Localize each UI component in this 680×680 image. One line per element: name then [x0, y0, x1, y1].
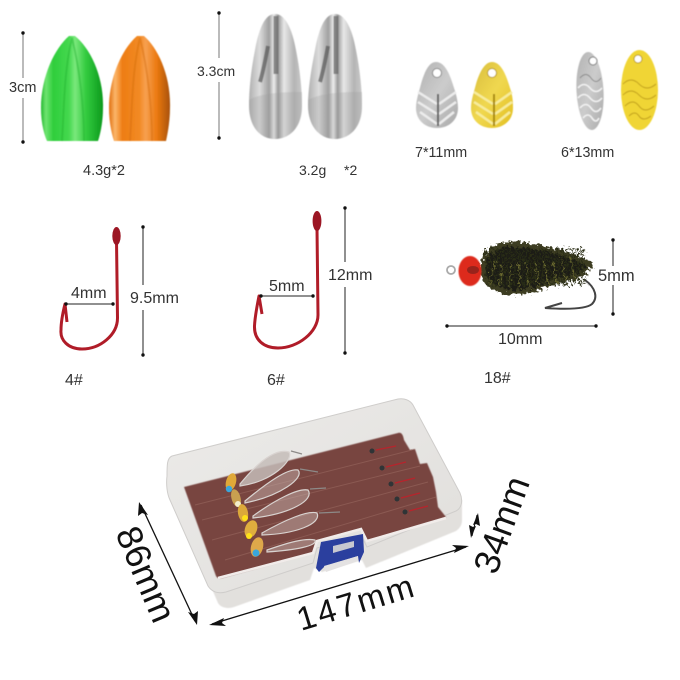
hook: 4#	[61, 227, 121, 349]
dimension: 3.3cm: 3.3cm	[197, 63, 235, 79]
label: 86mm: 86mm	[108, 520, 184, 628]
lure: green	[41, 36, 103, 141]
dimension: 5mm: 5mm	[269, 278, 305, 295]
dimension: 12mm	[328, 206, 372, 355]
arrow: 34mm	[469, 513, 480, 538]
arrow: 86mm	[138, 502, 198, 625]
label: 3.2g: 3.2g	[299, 162, 326, 178]
lure: silver left	[249, 14, 302, 139]
dimension: 3cm: 3cm	[9, 80, 36, 96]
dimension: 12mm: 12mm	[328, 267, 372, 284]
arrow: 147mm	[209, 545, 469, 626]
blade: silver scale	[574, 51, 606, 131]
box lid	[167, 399, 462, 593]
yellow beads	[224, 472, 265, 558]
rig markers	[370, 446, 428, 514]
label: 18#: 18#	[484, 370, 511, 387]
dimension: 10mm fly: 10mm	[498, 331, 542, 348]
clear spinners	[240, 451, 340, 552]
dimension: 3cm	[9, 31, 36, 144]
dimension: 4mm: 4mm	[71, 285, 107, 302]
dimension: 5mm fly: 5mm	[598, 267, 635, 285]
blade: gold scale	[621, 50, 658, 130]
label: 7*11mm: 7*11mm	[415, 145, 467, 161]
blue latch	[316, 534, 364, 572]
brown cards	[184, 433, 446, 578]
label: 34mm: 34mm	[465, 471, 538, 579]
label: *2: *2	[344, 162, 357, 178]
dimension: 5mm	[259, 278, 315, 298]
lid rim highlight	[218, 518, 446, 578]
label: 4#: 4#	[65, 372, 83, 389]
blade: gold leaf	[471, 62, 513, 128]
dimension: 3.3cm	[197, 11, 235, 140]
plastic box	[167, 399, 462, 608]
dimension: 10mm fly	[445, 324, 598, 348]
fly lure	[447, 244, 595, 309]
hook: 6#	[254, 211, 321, 348]
lure: silver right	[308, 14, 362, 139]
label: 6#: 6#	[267, 372, 285, 389]
label: 6*13mm: 6*13mm	[561, 145, 614, 161]
dimension: 9.5mm: 9.5mm	[130, 290, 179, 307]
label: 4.3g*2: 4.3g*2	[83, 163, 125, 179]
label: 147mm: 147mm	[292, 566, 420, 638]
dimension: 4mm	[64, 285, 115, 306]
dimension: 5mm fly	[598, 238, 635, 316]
dimension: 9.5mm	[130, 225, 179, 357]
box base	[175, 490, 462, 608]
lure: orange	[109, 36, 170, 141]
blade: silver leaf	[416, 62, 458, 128]
